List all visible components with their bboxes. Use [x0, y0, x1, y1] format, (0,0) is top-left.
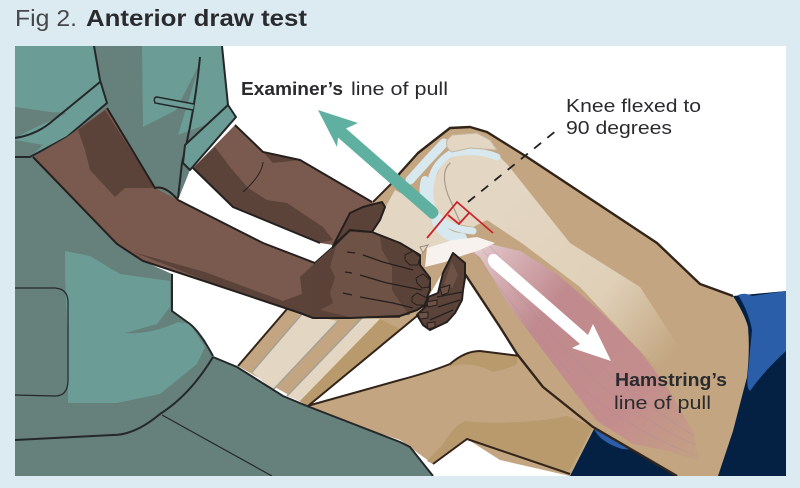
- label: knee flexed to 90 degrees: [566, 96, 701, 138]
- femur: [433, 155, 670, 360]
- right sleeve cuff: [183, 105, 236, 170]
- examiner's upper forearm: [193, 125, 385, 245]
- title: [15, 5, 307, 31]
- examiner's chest in scrubs: [15, 46, 433, 476]
- hamstring muscle: [463, 244, 700, 461]
- patella: [447, 133, 497, 152]
- examiner's lower arm: [33, 108, 400, 318]
- examiner's upper hand: [300, 202, 430, 318]
- shirt pocket: [154, 97, 194, 110]
- patient's lower leg and tibia: [238, 182, 456, 406]
- examiner's supporting leg: [300, 351, 600, 476]
- dashed pointer: [468, 130, 557, 202]
- label: hamstring's line of pull: line of pull: [614, 393, 711, 413]
- label: hamstring's line of pull: Hamstring’s: [615, 370, 727, 390]
- muscle fibres: [470, 246, 695, 455]
- label: examiner's line of pull: Examiner’s: [241, 79, 343, 99]
- hamstring's line of pull arrow: [488, 254, 611, 361]
- tendon attachment: [425, 237, 495, 267]
- label: examiner's line of pull: line of pull: [351, 79, 448, 99]
- examiner's line of pull arrow: [318, 110, 438, 219]
- examiner's lower hand: [417, 253, 465, 330]
- title: Fig 2.: [15, 5, 77, 31]
- tibial plateau: [374, 190, 450, 254]
- label: hamstring's line of pull: [614, 370, 727, 413]
- label: knee flexed to 90 degrees: Knee flexed to: [566, 96, 701, 116]
- patient's shorts: [570, 291, 786, 476]
- left sleeve: [15, 46, 107, 157]
- scrubs outlines: [15, 46, 433, 476]
- right-angle marker: [427, 202, 493, 238]
- title: Anterior draw test: [86, 5, 307, 31]
- ligaments and cartilage: [410, 143, 497, 238]
- label: examiner's line of pull: [241, 79, 448, 99]
- label: knee flexed to 90 degrees: 90 degrees: [566, 118, 672, 138]
- tibial tubercle: [420, 245, 428, 253]
- patient's thigh and knee: [393, 127, 749, 476]
